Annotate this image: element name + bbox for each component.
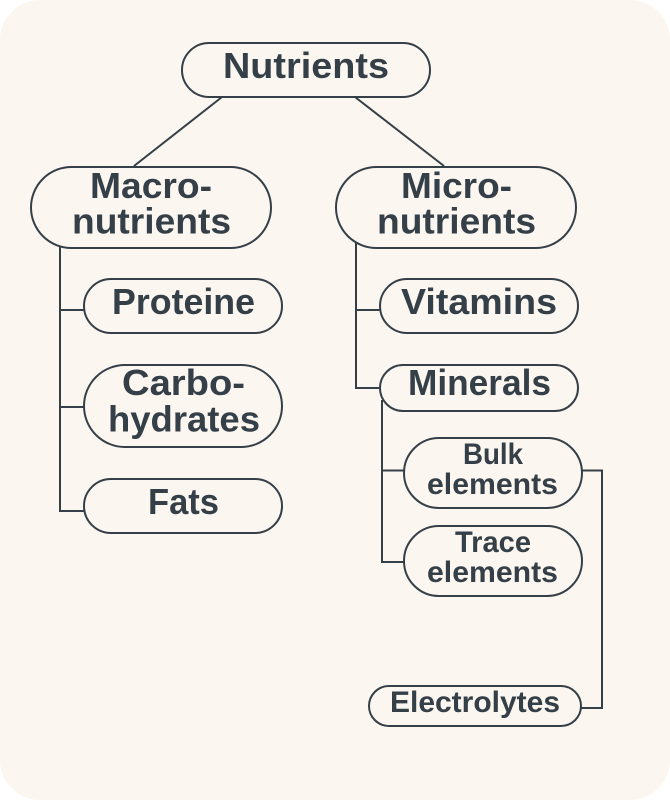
node: Carbohydrates: hydrates [108, 398, 260, 440]
node: Trace elements [404, 526, 582, 596]
node: Bulk elements [404, 438, 582, 508]
node: Nutrients: Nutrients [223, 45, 389, 86]
node: Electrolytes: Electrolytes [390, 686, 560, 719]
node: Vitamins: Vitamins [401, 281, 557, 322]
node: Carbohydrates: Carbo- [122, 362, 245, 403]
node: Micronutrients: nutrients [377, 200, 536, 242]
node: Fats [84, 479, 282, 533]
connector: macronutrients tree [60, 245, 85, 511]
node: Bulk elements: elements [427, 468, 558, 501]
node: Macronutrients: nutrients [72, 200, 231, 242]
node: Macronutrients: Macro- [90, 165, 212, 206]
connector: nutrients to macronutrients [134, 97, 222, 166]
node: Proteine [84, 279, 282, 333]
connector: minerals tree [382, 400, 404, 562]
node: Electrolytes [369, 686, 581, 726]
node: Macronutrients [31, 165, 271, 248]
connector: nutrients to micronutrients [355, 97, 444, 166]
connector: bulk elements to electrolytes [581, 470, 602, 708]
node: Micronutrients [336, 165, 576, 248]
node: Trace elements: Trace [455, 526, 531, 559]
node: Micronutrients: Micro- [401, 165, 512, 206]
node: Minerals: Minerals [408, 362, 551, 403]
node: Nutrients [182, 43, 430, 97]
node: Fats: Fats [148, 481, 219, 522]
connector: micronutrients tree [356, 243, 381, 388]
node: Proteine: Proteine [112, 281, 255, 322]
node: Vitamins [380, 279, 578, 333]
node: Carbohydrates [84, 362, 282, 447]
node: Minerals [380, 362, 578, 411]
node: Bulk elements: Bulk [463, 438, 523, 471]
node: Trace elements: elements [427, 556, 558, 589]
